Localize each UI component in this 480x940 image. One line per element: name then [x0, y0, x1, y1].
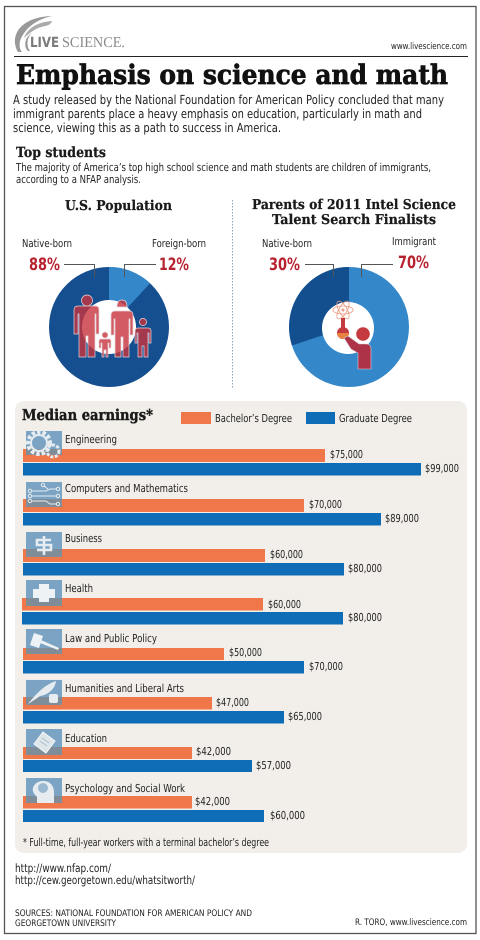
row: Business: Business	[65, 532, 102, 545]
panel: Intel finalists' parents	[252, 197, 456, 387]
heading: Top students: Top students	[16, 145, 106, 161]
row: Humanities and Liberal Arts: $65,000	[288, 710, 322, 723]
row: Health: $80,000	[348, 611, 382, 624]
legend: Graduate Degree	[339, 412, 412, 425]
icon: gavel	[26, 629, 62, 654]
row: Humanities and Liberal Arts	[23, 680, 322, 724]
row: Law and Public Policy: Law and Public Policy	[65, 632, 157, 645]
legend: Bachelor’s Degree	[215, 412, 292, 425]
heading: U.S. Population: U.S. Population	[65, 198, 172, 214]
footnote: * Full-time, full-year workers with a terminal bachelor’s degree	[23, 836, 269, 849]
heading: Parents of 2011 Intel Science Talent Search Finalists: Talent Search Finalists	[272, 212, 436, 228]
title: Emphasis on science and math	[16, 60, 448, 91]
intro paragraph	[13, 92, 444, 135]
icon: family	[74, 295, 151, 357]
icon: head with brain	[26, 778, 62, 803]
row: Computers and Mathematics: $70,000	[309, 498, 342, 511]
value: 70%: 70%	[398, 253, 429, 273]
row: Business	[23, 532, 382, 576]
icon: dollar sign	[26, 532, 62, 557]
value: 88%: 88%	[29, 255, 60, 275]
sources: GEORGETOWN UNIVERSITY	[15, 919, 116, 929]
icon: scientist with flask and atom	[333, 299, 371, 369]
panel: U.S. population	[22, 198, 206, 387]
icon: gears	[26, 431, 62, 457]
row: Engineering: $75,000	[330, 448, 363, 461]
row: Computers and Mathematics: $89,000	[385, 512, 419, 525]
row: Humanities and Liberal Arts: $47,000	[216, 696, 249, 709]
row: Health	[22, 580, 382, 624]
row: Engineering: Engineering	[65, 433, 117, 446]
logo: Live Science: LIVE	[30, 35, 59, 51]
row: Law and Public Policy: $70,000	[309, 660, 343, 673]
icon: quill and ink	[26, 680, 62, 705]
top students description	[15, 161, 431, 186]
heading: Parents of 2011 Intel Science Talent Search Finalists	[252, 197, 456, 228]
value: 12%: 12%	[159, 255, 189, 275]
row: Psychology and Social Work: Psychology and Social Work	[65, 782, 185, 795]
icon: book	[26, 729, 62, 755]
row: Health: Health	[65, 582, 93, 595]
row: Business: $80,000	[348, 562, 382, 575]
row: Humanities and Liberal Arts: Humanities and Liberal Arts	[65, 682, 184, 695]
reference links: http://cew.georgetown.edu/whatsitworth/	[15, 873, 195, 887]
sources	[15, 909, 252, 929]
label: native-born: Native-born	[262, 237, 312, 250]
leader lines	[64, 264, 156, 277]
logo: Live Science: SCIENCE.	[62, 35, 125, 51]
label: foreign-born: Foreign-born	[152, 237, 206, 250]
label: native-born: Native-born	[22, 237, 72, 250]
reference links: http://www.nfap.com/	[15, 861, 111, 875]
row: Health: $60,000	[268, 598, 301, 611]
row: Engineering: $99,000	[425, 462, 459, 475]
row: Education: $42,000	[196, 745, 231, 758]
sources: SOURCES: NATIONAL FOUNDATION FOR AMERICAN POLICY AND	[15, 909, 252, 919]
row: Law and Public Policy: $50,000	[229, 646, 262, 659]
row: Engineering	[23, 431, 459, 476]
legend	[181, 412, 412, 425]
panel: median earnings	[15, 401, 467, 853]
row: Psychology and Social Work: $42,000	[195, 795, 230, 808]
intro paragraph: science, viewing this as a path to success in America.	[13, 120, 281, 135]
heading: Parents of 2011 Intel Science Talent Search Finalists: Parents of 2011 Intel Science	[252, 197, 456, 213]
leader lines	[305, 264, 393, 277]
row: Education	[23, 729, 291, 772]
row: Education: $57,000	[256, 759, 291, 772]
donut chart: U.S. population	[49, 267, 169, 387]
top students description: according to a NFAP analysis.	[16, 173, 141, 186]
row: Computers and Mathematics: Computers and Mathematics	[65, 482, 188, 495]
row: Education: Education	[65, 732, 107, 745]
label: immigrant: Immigrant	[392, 235, 436, 248]
heading: Median earnings: Median earnings*	[22, 406, 153, 424]
icon: circuit	[26, 482, 62, 507]
logo: Live Science	[15, 16, 125, 52]
value: 30%: 30%	[269, 255, 300, 275]
row: Business: $60,000	[270, 548, 303, 561]
reference links	[15, 861, 195, 887]
row: Computers and Mathematics	[23, 482, 419, 526]
icon: medical cross	[26, 580, 62, 606]
donut chart: finalists' parents	[289, 267, 409, 387]
row: Law and Public Policy	[23, 629, 343, 674]
row: Psychology and Social Work: $60,000	[270, 809, 305, 822]
row: Psychology and Social Work	[23, 778, 305, 822]
